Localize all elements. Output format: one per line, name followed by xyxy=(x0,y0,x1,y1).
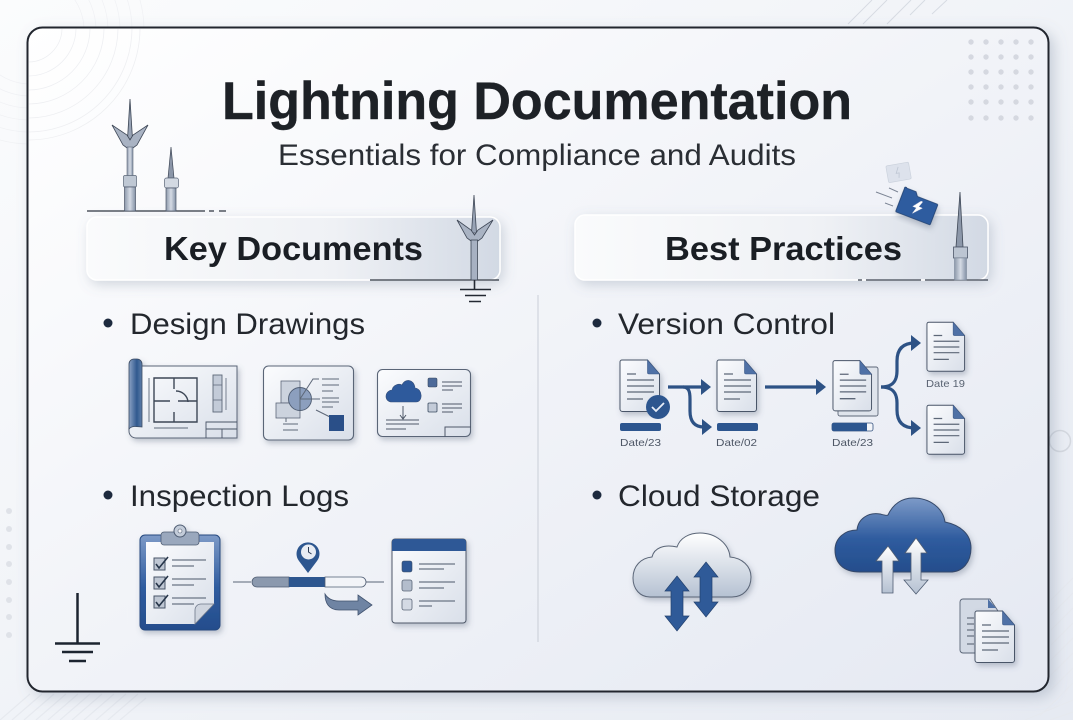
icon: lightning rod right xyxy=(858,192,988,280)
version flow: branch document top xyxy=(926,322,965,390)
icon: blue cloud with arrows xyxy=(835,498,971,594)
icon: cloud card xyxy=(378,370,471,437)
list item: inspection logs: Inspection Logs xyxy=(130,480,349,513)
icon: diagram card xyxy=(264,366,354,440)
version flow: document 2 xyxy=(716,360,758,449)
version flow: branch document top: Date 19 xyxy=(926,378,965,390)
version flow: document 1 with check xyxy=(620,360,670,449)
icon: stacked documents xyxy=(960,599,1014,662)
icon: checklist window xyxy=(392,539,466,623)
panel: best practices heading: Best Practices xyxy=(665,230,902,267)
subtitle: Essentials for Compliance and Audits xyxy=(278,139,796,172)
icon: blueprint sheet xyxy=(129,359,237,438)
panel: key documents heading: Key Documents xyxy=(164,230,423,267)
icon: light cloud with arrows xyxy=(633,533,751,631)
list item: cloud storage: Cloud Storage xyxy=(618,480,820,513)
icon: clipboard xyxy=(140,525,220,630)
icon: flying folders xyxy=(876,162,940,225)
corner arc pattern xyxy=(29,29,140,140)
icon: lightning rods top left xyxy=(87,99,226,211)
icon: lightning rod with ground xyxy=(370,195,499,302)
panel: best practices heading xyxy=(575,215,988,280)
version flow: branch document bottom xyxy=(927,405,965,454)
version flow: stacked document 3 xyxy=(832,361,878,449)
panel: key documents heading xyxy=(87,217,500,280)
dot grid xyxy=(968,39,1034,121)
divider xyxy=(537,295,539,642)
version flow: stacked document 3: Date/23 xyxy=(832,437,873,449)
list item: design drawings: Design Drawings xyxy=(130,308,365,341)
icon: timeline with pin xyxy=(233,542,384,615)
list item: version control: Version Control xyxy=(618,308,835,341)
title: Lightning Documentation xyxy=(222,72,852,131)
icon: ground symbol xyxy=(55,593,100,661)
version flow: document 2: Date/02 xyxy=(716,437,757,449)
arrows: version flow xyxy=(668,335,921,436)
version flow: document 1 with check: Date/23 xyxy=(620,437,661,449)
